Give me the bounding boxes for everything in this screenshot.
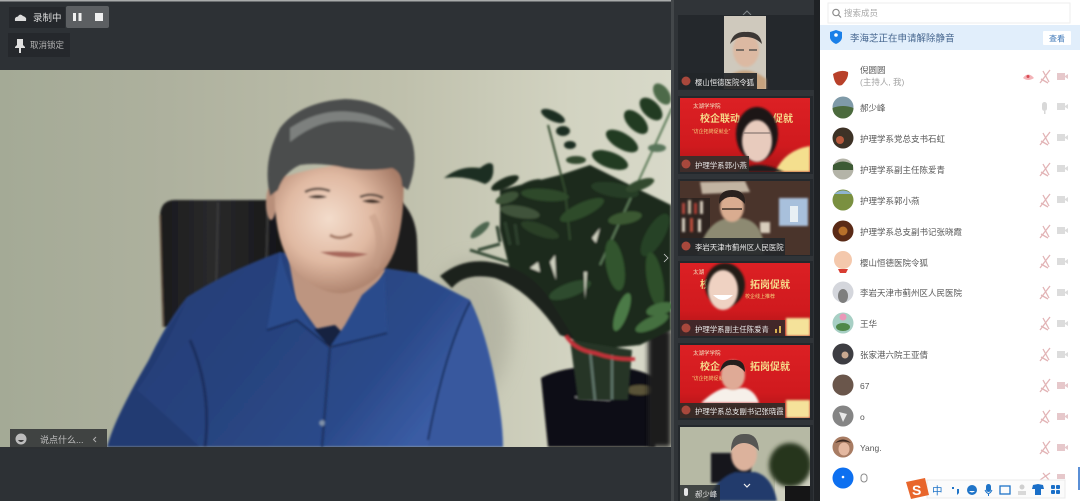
man: neck [288,255,385,347]
member: 护理学系党总支书石虹: 护理学系党总支书石虹 [860,134,946,144]
thumbnail: 护理学系郭小燕: 促就 [773,112,793,125]
member: 倪圆圆 host: (主持人, 我) [860,77,905,87]
member: 护理学系总支副书记张晓霞: 护理学系总支副书记张晓霞 [860,227,963,237]
thumbnail: 护理学系总支副书记张晓霞: 拓岗促就 [750,360,790,373]
scrollbar mark [1078,467,1080,490]
thumbnail: 护理学系副主任陈爱青: 校企线上推荐 [745,293,775,300]
thumbnail: 樱山恒德医院令狐 [678,15,814,90]
unlock pin button: 取消锁定 [30,40,65,50]
thumbnail: 护理学系郭小燕: 护理学系郭小燕 [695,161,747,170]
member: 张家港六院王亚倩 [832,344,929,364]
video scroll arrow [664,254,668,262]
unmute request notice: 李海芝正在申请解除静音 [850,32,955,44]
thumbnail: 李岩天津市蓟州区人民医院 [678,179,813,256]
thumbnail: 护理学系郭小燕: “访企拓岗促就业” [692,128,731,135]
thumbnail: 护理学系副主任陈爱青: 太湖 [693,268,705,276]
member: 护理学系党总支书石虹 [832,128,946,148]
plant [440,80,675,447]
camera icons [1057,73,1068,479]
plant pot [541,366,660,447]
top edge strip [0,0,671,2]
thumbnail: 护理学系副主任陈爱青: 护理学系副主任陈爱青 [695,325,769,334]
member: 李岩天津市蓟州区人民医院: 李岩天津市蓟州区人民医院 [860,288,963,298]
plant: leaves [444,80,675,336]
member: Yang.: Yang. [860,443,882,453]
icon: pause [73,13,82,21]
man: shirt [107,252,503,447]
thumbnail: 护理学系郭小燕 [678,96,813,174]
member: 郝少峰 [832,96,886,118]
icon: stop [95,13,103,21]
active microphone icon [1042,102,1047,114]
thumbnail: 郝少峰 [678,425,813,501]
member: o: o [860,412,865,422]
member: 护理学系郭小燕: 护理学系郭小燕 [860,196,920,206]
unmute request notice [820,25,1080,50]
search box [828,3,1070,23]
member: 樱山恒德医院令狐 [834,251,929,273]
member: 67 [832,374,870,396]
member: 护理学系郭小燕 [832,190,920,210]
thumbnail: 郝少峰: 郝少峰 [695,490,718,499]
chat input bar [10,429,107,449]
thumbnail: 护理学系副主任陈爱青 [678,261,813,338]
input method toolbar: 中 [932,484,942,497]
thumbnail: 李岩天津市蓟州区人民医院: 李岩天津市蓟州区人民医院 [695,243,784,252]
member: 樱山恒德医院令狐: 樱山恒德医院令狐 [860,258,929,268]
unlock pin button [8,33,70,57]
thumbnail: 护理学系郭小燕: 校企联动 [700,112,740,125]
main video panel: speaker [0,70,675,447]
plant: wall gaps between leaves [530,228,600,300]
icon: sogou logo: S [912,482,921,498]
thumbnail column [671,0,820,501]
thumbnail: 樱山恒德医院令狐: 樱山恒德医院令狐 [695,78,755,87]
input method toolbar [906,478,1065,499]
recording status toolbar: 录制中 [33,12,62,24]
thumbnail: 护理学系总支副书记张晓霞 [678,343,813,420]
muted microphone icons [1040,70,1050,480]
member: 张家港六院王亚倩: 张家港六院王亚倩 [860,350,929,360]
member: blue avatar [832,468,867,488]
member: 郝少峰: 郝少峰 [860,103,886,113]
member: o [832,406,865,426]
member: 护理学系副主任陈爱青 [832,158,945,180]
thumbnail: 护理学系总支副书记张晓霞: 护理学系总支副书记张晓霞 [695,407,784,416]
member: 倪圆圆 host: 倪圆圆 [860,65,886,75]
member rows [832,65,1034,488]
thumbnail: 护理学系总支副书记张晓霞: “访企拓岗促就业” [692,375,731,382]
icon: sogou logo [906,478,929,499]
recording status toolbar [9,6,109,28]
plant: stems [570,340,632,400]
man: face and hair [266,99,415,293]
chat input bar: 说点什么... [40,434,84,445]
member: 李岩天津市蓟州区人民医院 [832,282,963,303]
thumbnail: 护理学系副主任陈爱青: 校 [700,278,710,291]
man: collar [267,252,387,447]
office chair [160,200,418,340]
unmute request notice: 查看 [1049,34,1065,44]
plant: red band [566,336,635,359]
plant: dark foliage mass [500,165,671,350]
thumbnail: 护理学系副主任陈爱青: 拓岗促就 [750,278,790,291]
icon: cloud [15,15,26,21]
thumbnail: 护理学系郭小燕: 太湖学学院 [693,102,721,110]
member: 护理学系总支副书记张晓霞 [832,220,963,242]
member: 王华 [832,312,878,334]
search box: 搜索成员 [844,8,878,18]
member: 67: 67 [860,381,870,391]
member panel [820,0,1080,501]
scroll up arrow [743,11,751,15]
thumbnail: 护理学系总支副书记张晓霞: 太湖学学院 [693,349,721,357]
member: 王华: 王华 [860,319,878,329]
plant: arching branch [440,261,575,340]
member: Yang. [832,436,882,458]
member: 护理学系副主任陈爱青: 护理学系副主任陈爱青 [860,165,945,175]
thumbnail: 护理学系总支副书记张晓霞: 校企 [700,360,720,373]
member: 倪圆圆 host [833,65,1034,87]
